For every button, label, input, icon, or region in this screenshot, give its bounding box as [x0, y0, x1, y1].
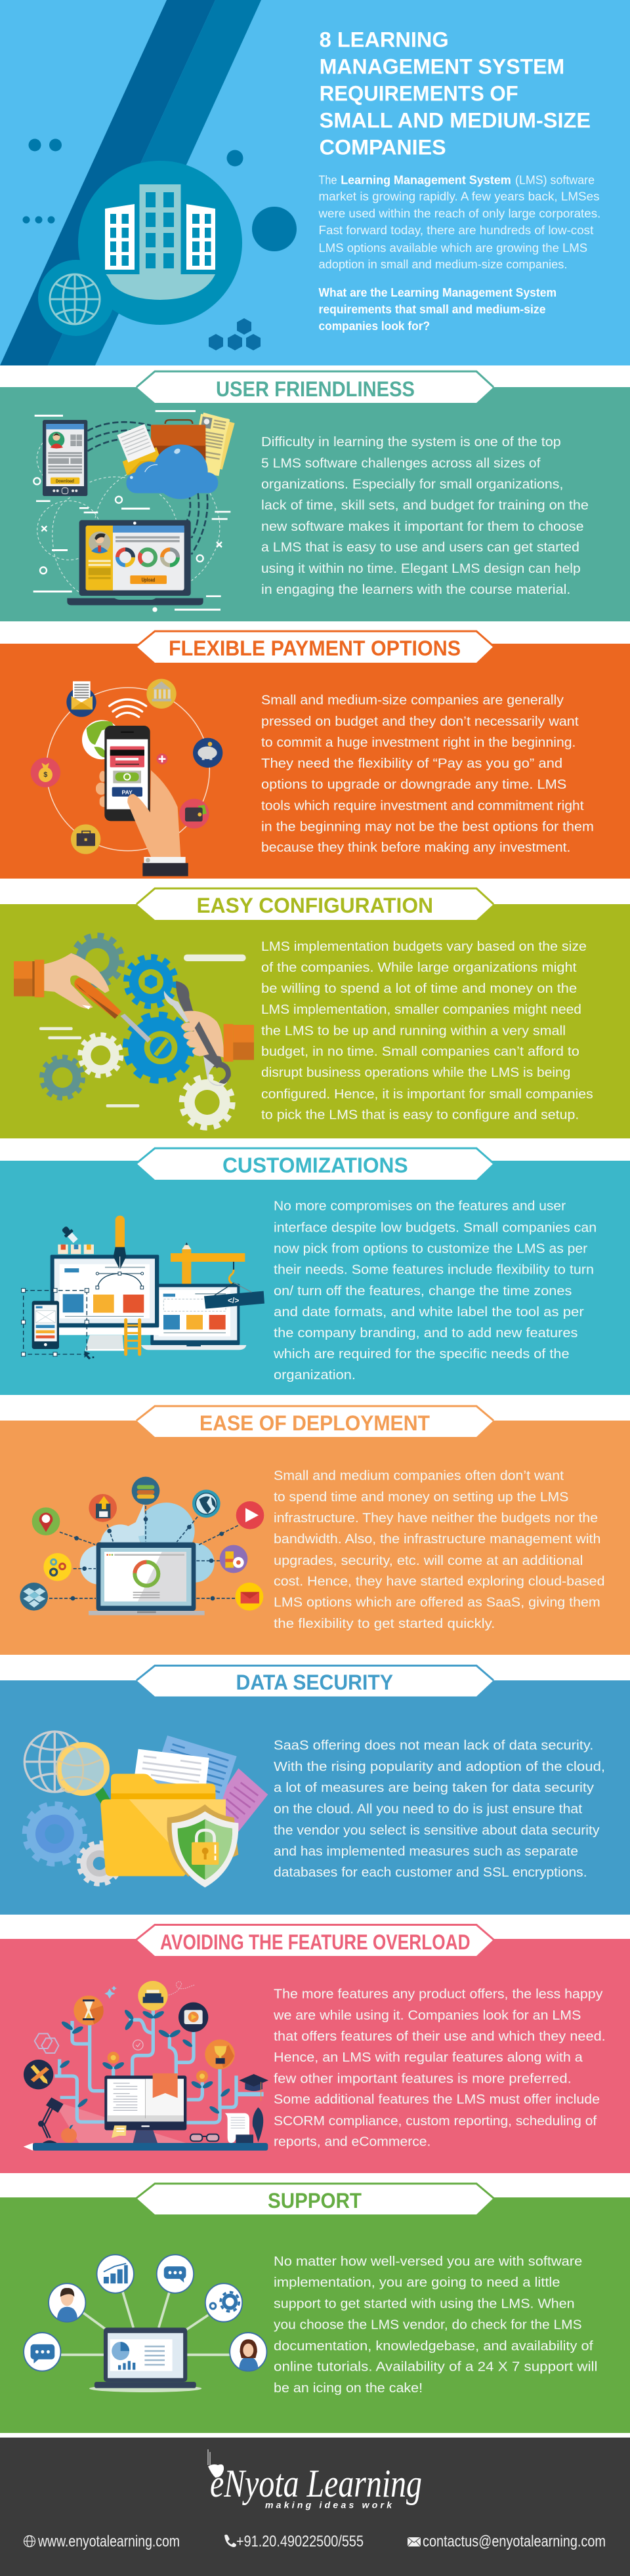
heading: avoiding the feature overload [136, 1924, 494, 1956]
illustration: cloud laptop with app icons [20, 1477, 264, 1615]
body text: a lot of measures are being taken for data security [274, 1781, 594, 1795]
intro text: were used within the reach of only large corporates. [318, 206, 600, 220]
illustration: design tools, monitor and laptop [22, 1216, 264, 1360]
leaves [59, 2008, 231, 2115]
icon: scroll and inkwell with feather [225, 2108, 263, 2143]
body text: to commit a huge investment right in the beginning. [261, 736, 576, 750]
icon: envelope [66, 681, 96, 717]
title: SMALL AND MEDIUM-SIZE [320, 109, 591, 133]
body text: organizations. Especially for small organizations, [261, 478, 563, 492]
body text: you choose the LMS vendor, do check for the LMS [274, 2317, 582, 2332]
body text: be an icing on the cake! [274, 2381, 423, 2396]
body text: infrastructure. They have neither the budgets nor the [274, 1511, 598, 1526]
website: www.enyotalearning.com [37, 2533, 180, 2550]
icon: phone wireframe [32, 1301, 59, 1349]
icon: right hand [181, 1007, 254, 1068]
icon: magnifier [57, 1745, 110, 1803]
icon: desk lamp and apple [38, 2098, 77, 2143]
icon: gears [43, 1553, 72, 1581]
icon: dropbox [20, 1583, 48, 1611]
body text: lack of time, skill sets, and budget for training on the [261, 498, 589, 512]
body text: implementation, you are going to need a little [274, 2275, 560, 2290]
logo: eNyota Learning [210, 2462, 422, 2505]
body text: Small and medium-size companies are generally [261, 693, 564, 707]
title: REQUIREMENTS OF [320, 82, 518, 106]
body text: few other important features is more preferred. [274, 2072, 572, 2087]
panel: footer [0, 2438, 630, 2576]
heading: support: SUPPORT [268, 2189, 362, 2212]
icon: code sign [204, 1283, 264, 1309]
icon: database [132, 1477, 159, 1505]
body text: on/ turn off the features, change the time zones [274, 1284, 572, 1298]
body text: Some additional features the LMS must offer include [274, 2092, 600, 2107]
panel: data security [0, 1665, 630, 1915]
body text: Hence, an LMS with regular features along with a [274, 2050, 583, 2065]
icon: pencil and ruler [24, 2060, 53, 2089]
body text: the flexibility to get started quickly. [274, 1617, 495, 1631]
heading: data security [136, 1665, 494, 1697]
heading: user friendliness: USER FRIENDLINESS [216, 377, 415, 401]
intro text: adoption in small and medium-size companies. [319, 257, 567, 271]
icon: map pin [32, 1507, 60, 1535]
heading: support [136, 2183, 494, 2214]
body text: tools which require investment and commitment right [261, 799, 584, 814]
icon: ladder [126, 1320, 140, 1354]
body text: their needs. Some features include flexibility to turn [274, 1262, 594, 1277]
body text: With the rising popularity and adoption of the cloud, [274, 1760, 605, 1774]
illustration: hands with gears and tools [14, 936, 254, 1128]
intro text: Fast forward today, there are hundreds of low-cost [319, 223, 593, 237]
icon: globe [38, 260, 114, 336]
icon: briefcase [71, 824, 100, 854]
body text: support to get started with using the LMS. When [274, 2297, 575, 2312]
icon: decorative dots and hexagons [22, 139, 297, 350]
logo [208, 2449, 422, 2510]
body text: interface despite low budgets. Small companies can [274, 1221, 597, 1236]
body text: reports, and eCommerce. [274, 2135, 430, 2150]
body text: documentation, knowledgebase, and availability of [274, 2339, 593, 2354]
icon: package with disc [220, 1545, 247, 1573]
illustration: feature tree from monitor [24, 1981, 268, 2151]
title: 8 LEARNING [320, 28, 449, 51]
body text: in engaging the learners with the course material. [261, 583, 570, 597]
body text: to pick the LMS that is easy to configure and setup. [261, 1108, 579, 1123]
icon: hourglass [74, 1995, 104, 2025]
body text: and date formats, and white label the tool as per [274, 1305, 584, 1319]
icon: plus badge [157, 753, 167, 764]
illustration: mobile payment: PAY [121, 789, 133, 795]
panel: easy configuration [0, 888, 630, 1138]
heading: ease of deployment [136, 1405, 494, 1437]
icon: woman [230, 2333, 267, 2371]
illustration: mobile payment [31, 679, 222, 876]
intro text: The [319, 173, 337, 186]
body text [261, 435, 589, 597]
illustration: secured folder [24, 1732, 268, 1888]
icon: documents [135, 1735, 268, 1832]
body text: SCORM compliance, custom reporting, scheduling of [274, 2114, 597, 2129]
intro text: LMS options available which are growing the LMS [319, 241, 587, 255]
body text: pressed on budget and they don’t necessarily want [261, 715, 579, 729]
body text: of the companies. While large organizations might [261, 961, 577, 975]
body text: and has implemented measures such as separate [274, 1844, 578, 1859]
icon: glasses [190, 2134, 219, 2141]
body text: the vendor you select is sensitive about data security [274, 1823, 600, 1838]
icon: grey-teal gear top [73, 936, 122, 985]
icon: wallet [179, 799, 209, 829]
body text: to spend time and money on setting up the LMS [274, 1490, 568, 1505]
icon: laptop [141, 1284, 246, 1350]
question text: requirements that small and medium-size [319, 302, 546, 316]
body text: we are while using it. Companies look for an LMS [273, 2008, 581, 2023]
icon: bezier curve and pen [96, 1216, 144, 1289]
body text: disrupt business operations while the LMS is being [261, 1066, 570, 1080]
icon: cream gear [80, 1035, 121, 1075]
heading: avoiding the feature overload: AVOIDING THE FEATURE OVERLOAD [160, 1930, 470, 1954]
title [320, 28, 591, 159]
illustration: phone, cloud and laptop: Upload [142, 577, 155, 583]
body text: be willing to spend a lot of time and money on the [261, 982, 577, 996]
icon: left hand [14, 953, 110, 1009]
body text: LMS implementation, smaller companies might need [261, 1003, 581, 1017]
body text: SaaS offering does not mean lack of data security. [274, 1739, 593, 1753]
body text: organization. [274, 1368, 356, 1382]
panel: ease of deployment [0, 1405, 630, 1655]
body text: No more compromises on the features and user [274, 1199, 566, 1214]
heading: user friendliness [136, 371, 494, 403]
icon: money bag: $ [43, 771, 47, 779]
icon: bar chart [97, 2254, 134, 2293]
question text: companies look for? [319, 319, 430, 333]
icon: man [49, 2283, 85, 2322]
icon: grey gear [79, 1843, 120, 1884]
panel: customizations [0, 1148, 630, 1395]
icon: hexagons and sparkles [35, 1982, 195, 2053]
icon: blue gear top [126, 957, 176, 1007]
heading: data security: DATA SECURITY [236, 1671, 393, 1694]
panel: flexible payment options [0, 631, 630, 879]
icon: monitor [51, 1255, 159, 1351]
icon: settings gears [205, 2283, 242, 2322]
icon: wifi waves [110, 699, 146, 717]
panel: avoiding the feature overload [0, 1924, 630, 2173]
icon: screwdriver [74, 978, 151, 1043]
icon: bank [146, 679, 177, 709]
icon: play button [236, 1501, 264, 1529]
icon: small flowers [108, 2040, 208, 2082]
icon: trophy [205, 2039, 235, 2069]
logo: making ideas work [265, 2500, 392, 2510]
heading: ease of deployment: EASE OF DEPLOYMENT [200, 1411, 430, 1435]
body text: upgrades, security, etc. will come at an additional [274, 1554, 583, 1568]
icon: shield with padlock [167, 1804, 238, 1888]
icon: cream gear bottom [182, 1077, 232, 1128]
icon: floppy upload [89, 1494, 117, 1522]
intro text [318, 173, 600, 271]
intro text: Learning Management System [341, 173, 511, 186]
body text: bandwidth. Also, the infrastructure management with [274, 1532, 600, 1547]
icon: pencil base [24, 2143, 268, 2151]
body text: options to upgrade or downgrade any time. LMS [261, 778, 566, 792]
body text: budget, in no time. Small companies can’t afford to [261, 1045, 579, 1059]
heading: flexible payment options: FLEXIBLE PAYMENT OPTIONS [169, 636, 461, 660]
body text: cost. Hence, they have started exploring cloud-based [274, 1575, 605, 1589]
icon: piggy bank [193, 738, 222, 768]
tree branches [54, 2008, 264, 2123]
body text: using it within no time. Elegant LMS design can help [261, 562, 581, 576]
body text: online tutorials. Availability of a 24 X 7 support will [274, 2360, 597, 2375]
body text: They need the flexibility of “Pay as you go” and [261, 757, 562, 771]
body text: the LMS to be up and running within a very small [261, 1024, 566, 1038]
icon: city buildings in circle [78, 161, 242, 325]
panel: user friendliness [0, 371, 630, 621]
icon: book stack circle [138, 1981, 168, 2010]
body text: Difficulty in learning the system is one of the top [261, 435, 561, 449]
panel: support [0, 2183, 630, 2433]
icon: monitor with open book [104, 2073, 186, 2143]
icon: globe [192, 1489, 220, 1518]
body text [261, 940, 593, 1123]
icon: wireframe globe [24, 1732, 85, 1792]
icon: video [178, 2003, 208, 2032]
icon: mail [236, 1583, 263, 1611]
illustration: phone, cloud and laptop: Download [56, 478, 74, 484]
body text [273, 1987, 606, 2150]
icon: graduation cap [239, 2074, 268, 2101]
illustration: laptop with support icons [24, 2254, 267, 2392]
icon: big blue gear [125, 1014, 192, 1081]
body text: a LMS that is easy to use and users can get started [261, 541, 579, 555]
body text: which are required for the specific needs of the [273, 1347, 570, 1361]
heading: flexible payment options [136, 631, 494, 663]
panel: hero header [0, 0, 630, 365]
body text: LMS options which are offered as SaaS, giving them [274, 1596, 600, 1610]
intro text: market is growing rapidly. A few years back, LMSes [319, 189, 600, 203]
body text: Small and medium companies often don’t want [274, 1469, 564, 1484]
body text: now pick from options to customize the LMS as per [274, 1242, 588, 1257]
icon: grey-teal gear bottom [42, 1057, 83, 1098]
icon: crane [171, 1242, 245, 1286]
question text: What are the Learning Management System [319, 285, 556, 299]
body text: LMS implementation budgets vary based on the size [261, 940, 587, 954]
body text: 5 LMS software challenges across all sizes of [261, 457, 541, 471]
body text: in the beginning may not be the best options for them [261, 820, 594, 835]
body text [261, 693, 594, 855]
body text: the company branding, and to add new features [274, 1326, 578, 1340]
icon: wrench [164, 981, 231, 1086]
phone: +91.20.49022500/555 [236, 2533, 364, 2550]
icon: globe [82, 720, 121, 759]
body text: that offers features of their use and which they need. [274, 2029, 606, 2044]
icon: speech bubble [157, 2254, 194, 2293]
heading: easy configuration [136, 888, 494, 920]
intro text: (LMS) software [515, 173, 595, 186]
body text [274, 2254, 597, 2396]
body text [274, 1739, 605, 1880]
icon: pipette and swatches [58, 1224, 94, 1254]
icon: code sign: </> [228, 1296, 239, 1305]
icon: laptop with donut chart [89, 1543, 205, 1615]
body text: databases for each customer and SSL encryptions. [274, 1865, 587, 1880]
body text [273, 1199, 597, 1382]
body text: because they think before making any investment. [261, 841, 570, 855]
title: MANAGEMENT SYSTEM [320, 55, 564, 79]
heading: easy configuration: EASY CONFIGURATION [197, 894, 433, 917]
icon: laptop [89, 2328, 201, 2392]
icon: sticky note [112, 2125, 127, 2138]
icon: selection frame [22, 1289, 94, 1360]
heading: customizations: CUSTOMIZATIONS [222, 1153, 408, 1177]
heading: customizations [136, 1148, 494, 1180]
title: COMPANIES [320, 136, 446, 159]
body text: The more features any product offers, the less happy [274, 1987, 602, 2002]
question text [319, 285, 556, 333]
body text: configured. Hence, it is important for small companies [261, 1087, 593, 1102]
illustration: phone, cloud and laptop [33, 410, 235, 612]
body text: on the cloud. All you need to do is just ensure that [274, 1802, 583, 1816]
icon: blue gear [25, 1804, 85, 1863]
body text: new software makes it important for them to choose [261, 520, 584, 534]
icon: money bag [31, 758, 60, 787]
body text: No matter how well-versed you are with software [274, 2254, 582, 2269]
icon: folder [100, 1774, 226, 1876]
body text [274, 1469, 605, 1631]
icon: chat bubble left [24, 2333, 60, 2371]
